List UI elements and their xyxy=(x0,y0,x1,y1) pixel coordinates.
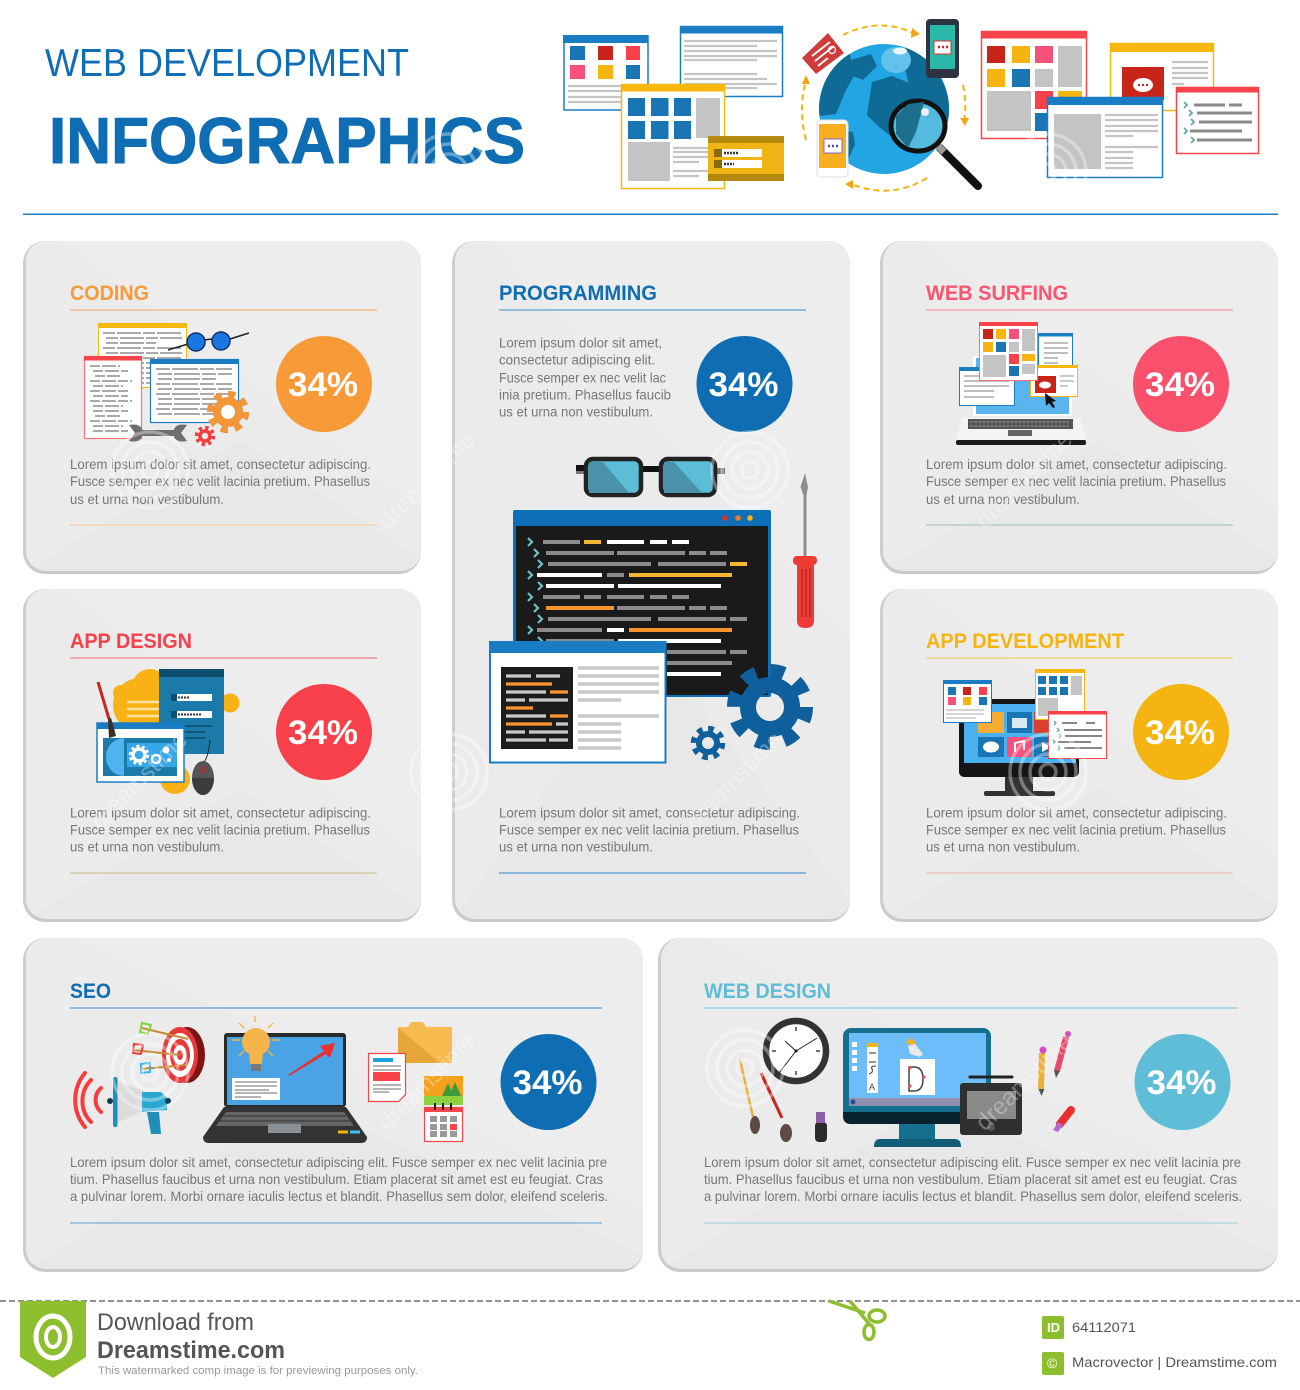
programming body text xyxy=(499,806,800,854)
icon: glasses xyxy=(576,459,725,495)
web design body text: a pulvinar lorem. Morbi ornare iaculis lectus et blandit. Phasellus sem dolor, eleifend sceleris. xyxy=(704,1189,1242,1204)
watermark overlay: dreamstime xyxy=(373,1028,481,1136)
coding body text xyxy=(70,457,371,507)
programming percentage badge: 34% xyxy=(708,366,778,404)
web surfing percentage badge xyxy=(1133,336,1229,432)
header illustration: globe with magnifier and devices xyxy=(802,19,978,192)
icon: laptop with light bulb and growth arrow xyxy=(203,1016,367,1143)
footer id badge: ID xyxy=(1047,1320,1060,1335)
programming intro text: consectetur adipiscing elit. xyxy=(499,352,655,368)
programming heading: PROGRAMMING xyxy=(499,282,657,305)
programming card background xyxy=(452,241,850,922)
programming intro text: us et urna non vestibulum. xyxy=(499,404,653,420)
app development card background xyxy=(880,589,1278,922)
app design percentage badge xyxy=(276,684,372,780)
header rule xyxy=(23,214,1278,215)
panel: seo xyxy=(23,938,643,1272)
icon: screwdriver xyxy=(793,473,817,628)
web design body text xyxy=(704,1155,1242,1204)
header illustration: right window cluster xyxy=(981,31,1259,178)
programming intro text xyxy=(499,336,671,420)
coding heading: CODING xyxy=(70,282,149,305)
app design percentage badge: 34% xyxy=(288,714,358,752)
app development body text: Fusce semper ex nec velit lacinia pretium. Phasellus xyxy=(926,822,1226,838)
seo percentage badge: 34% xyxy=(512,1064,582,1102)
seo body text: tium. Phasellus faucibus et urna non vestibulum. Etiam placerat sit amet est eu feugiat. Cras xyxy=(70,1172,603,1187)
app development body text: us et urna non vestibulum. xyxy=(926,840,1080,854)
icon: code windows with glasses and gears xyxy=(84,323,249,444)
web surfing body text: Lorem ipsum dolor sit amet, consectetur adipiscing. xyxy=(926,457,1227,472)
footer id badge xyxy=(1042,1316,1136,1339)
coding body text: Fusce semper ex nec velit lacinia pretium. Phasellus xyxy=(70,474,370,489)
web surfing card background xyxy=(880,241,1278,574)
footer id badge: 64112071 xyxy=(1072,1319,1136,1335)
web surfing body text: us et urna non vestibulum. xyxy=(926,492,1080,507)
seo card background xyxy=(23,938,643,1272)
panel: app development xyxy=(880,589,1278,922)
icon: scissors xyxy=(829,1301,885,1340)
footer download text xyxy=(97,1309,418,1377)
web surfing heading: WEB SURFING xyxy=(926,282,1068,305)
watermark overlay: dreamstime xyxy=(680,726,788,834)
footer author credit: © xyxy=(1047,1355,1058,1371)
app development body text xyxy=(926,806,1227,854)
app design body text: us et urna non vestibulum. xyxy=(70,840,224,854)
watermark overlay: dreamstime xyxy=(970,1028,1078,1136)
icon: desktop monitor with design software xyxy=(843,1028,991,1147)
panel: programming xyxy=(452,241,850,922)
app design card background xyxy=(23,589,421,922)
icon: pencils and red usb xyxy=(1038,1031,1071,1132)
icon: wall clock xyxy=(766,1021,826,1081)
footer download text: Download from xyxy=(97,1309,254,1336)
coding body text: us et urna non vestibulum. xyxy=(70,492,224,507)
footer download text: Dreamstime.com xyxy=(97,1337,285,1364)
panel: web surfing xyxy=(880,241,1278,574)
app development percentage badge: 34% xyxy=(1145,714,1215,752)
app design body text xyxy=(70,806,371,854)
footer author credit xyxy=(1042,1352,1277,1375)
programming body text: us et urna non vestibulum. xyxy=(499,840,653,854)
app design body text: Fusce semper ex nec velit lacinia pretium. Phasellus xyxy=(70,822,370,838)
icon: desktop monitor with design software: A xyxy=(869,1082,875,1092)
header illustration: left window cluster xyxy=(563,26,784,188)
web design body text: Lorem ipsum dolor sit amet, consectetur adipiscing elit. Fusce semper ex nec velit lacinia pre xyxy=(704,1155,1241,1170)
panel: app design xyxy=(23,589,421,922)
seo body text: a pulvinar lorem. Morbi ornare iaculis lectus et blandit. Phasellus sem dolor, eleifend sceleris. xyxy=(70,1189,608,1204)
programming intro text: Fusce semper ex nec velit lac xyxy=(499,370,666,386)
icon: monitor with app tiles and windows xyxy=(943,669,1107,796)
app development heading: APP DEVELOPMENT xyxy=(926,630,1124,653)
watermark overlay: dreamstime xyxy=(85,726,193,834)
programming body text: Fusce semper ex nec velit lacinia pretium. Phasellus xyxy=(499,822,799,838)
title xyxy=(45,42,525,177)
app design body text: Lorem ipsum dolor sit amet, consectetur adipiscing. xyxy=(70,806,371,820)
coding card background xyxy=(23,241,421,574)
icon: paint brushes and usb stick xyxy=(740,1060,827,1142)
watermark overlay xyxy=(85,134,1086,1136)
watermark overlay: dreamstime xyxy=(970,426,1078,534)
web design percentage badge: 34% xyxy=(1146,1064,1216,1102)
panel: web design xyxy=(658,938,1278,1272)
web surfing body text xyxy=(926,457,1227,507)
footer ribbon logo xyxy=(20,1301,86,1378)
icon: target with arrows xyxy=(133,1023,205,1083)
web design card background xyxy=(658,938,1278,1272)
web design body text: tium. Phasellus faucibus et urna non vestibulum. Etiam placerat sit amet est eu feugiat. Cras xyxy=(704,1172,1237,1187)
coding percentage badge: 34% xyxy=(288,366,358,404)
seo body text xyxy=(70,1155,608,1204)
seo heading: SEO xyxy=(70,980,111,1003)
icon: large gear xyxy=(734,671,806,743)
icon: laptop with browser windows xyxy=(956,322,1086,445)
title: INFOGRAPHICS xyxy=(49,104,525,177)
web surfing body text: Fusce semper ex nec velit lacinia pretium. Phasellus xyxy=(926,474,1226,489)
app development body text: Lorem ipsum dolor sit amet, consectetur adipiscing. xyxy=(926,806,1227,820)
icon: small gear xyxy=(694,729,722,757)
programming intro text: inia pretium. Phasellus faucib xyxy=(499,388,671,402)
watermark overlay: dreamstime xyxy=(373,426,481,534)
title: WEB DEVELOPMENT xyxy=(45,42,409,85)
seo body text: Lorem ipsum dolor sit amet, consectetur adipiscing elit. Fusce semper ex nec velit lacinia pre xyxy=(70,1155,607,1170)
web design heading: WEB DESIGN xyxy=(704,980,831,1003)
footer author credit: Macrovector | Dreamstime.com xyxy=(1072,1354,1277,1370)
programming body text: Lorem ipsum dolor sit amet, consectetur adipiscing. xyxy=(499,806,800,820)
web surfing percentage badge: 34% xyxy=(1145,366,1215,404)
icon: folder document and calendar xyxy=(368,1022,463,1142)
icon: graphics tablet with stylus xyxy=(960,1077,1022,1135)
seo percentage badge xyxy=(500,1034,596,1130)
app development percentage badge xyxy=(1133,684,1229,780)
panel: coding xyxy=(23,241,421,574)
programming intro text: Lorem ipsum dolor sit amet, xyxy=(499,336,662,350)
icon: app design form, window and mouse xyxy=(97,669,240,795)
app design heading: APP DESIGN xyxy=(70,630,192,653)
footer dashed cut line xyxy=(0,1300,1300,1302)
icon: megaphone with sound waves xyxy=(75,1073,171,1134)
icon: code editor window xyxy=(513,510,771,697)
coding percentage badge xyxy=(276,336,372,432)
icon: page window with code thumbnail xyxy=(489,641,666,762)
programming percentage badge xyxy=(696,336,792,432)
coding body text: Lorem ipsum dolor sit amet, consectetur adipiscing. xyxy=(70,457,371,472)
footer download text: This watermarked comp image is for previewing purposes only. xyxy=(98,1365,418,1377)
web design percentage badge xyxy=(1134,1034,1230,1130)
